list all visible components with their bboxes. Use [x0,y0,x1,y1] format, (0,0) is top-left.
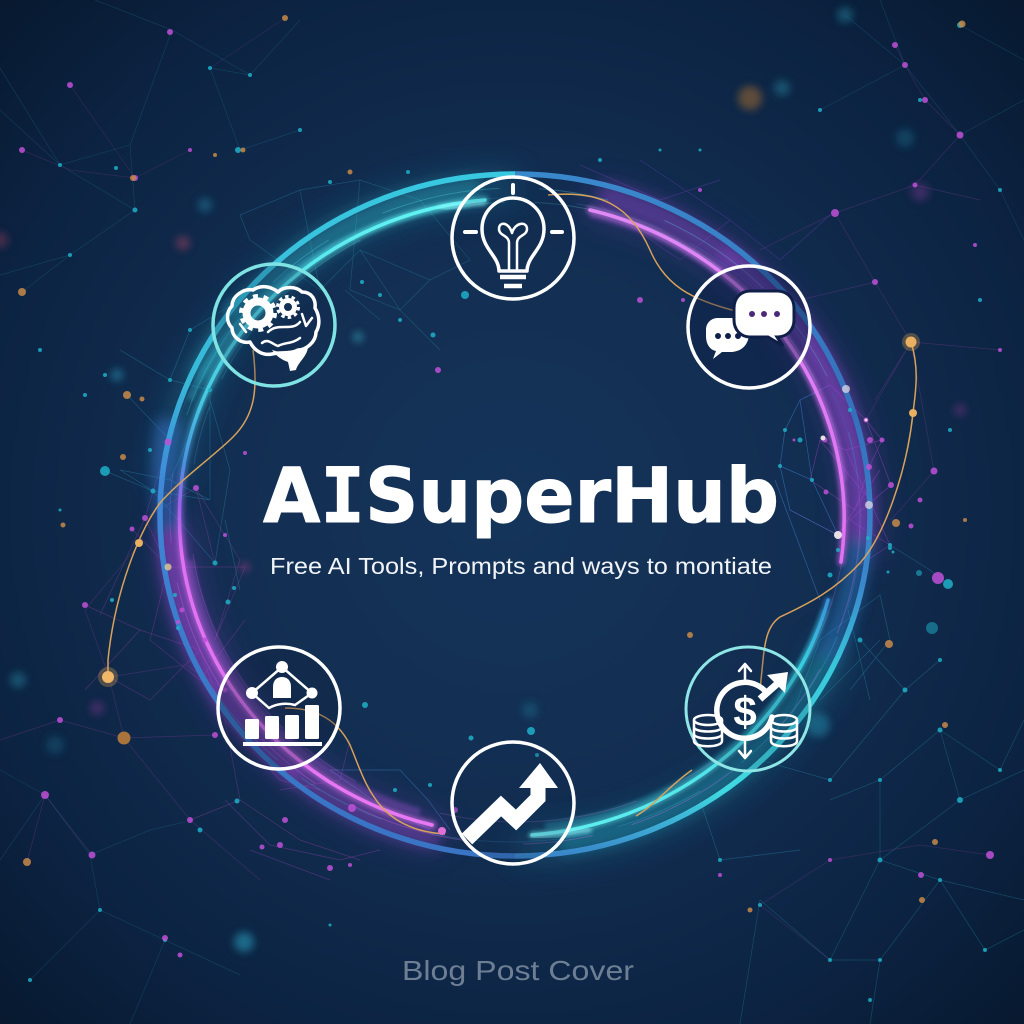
icon: money coin and arrows [686,647,810,771]
subtitle: Free AI Tools, Prompts and ways to montiate [270,553,772,579]
icon: analytics bars and nodes [218,647,340,769]
inner glowing ring [179,200,844,836]
icon: money coin and arrows: $ [733,688,757,735]
icon: chat bubbles [688,266,810,388]
orange connector wires [108,194,916,834]
title: AISuperHub [263,451,779,540]
icon: brain with gears [213,264,335,386]
wire nodes [98,333,920,835]
footer caption: Blog Post Cover [402,955,634,986]
ring glow [170,188,862,845]
icon: growth arrow [452,742,574,864]
icon: light bulb [452,177,574,299]
haze band between rings [165,190,861,842]
outer ring [160,174,870,856]
ring filaments [161,188,861,844]
